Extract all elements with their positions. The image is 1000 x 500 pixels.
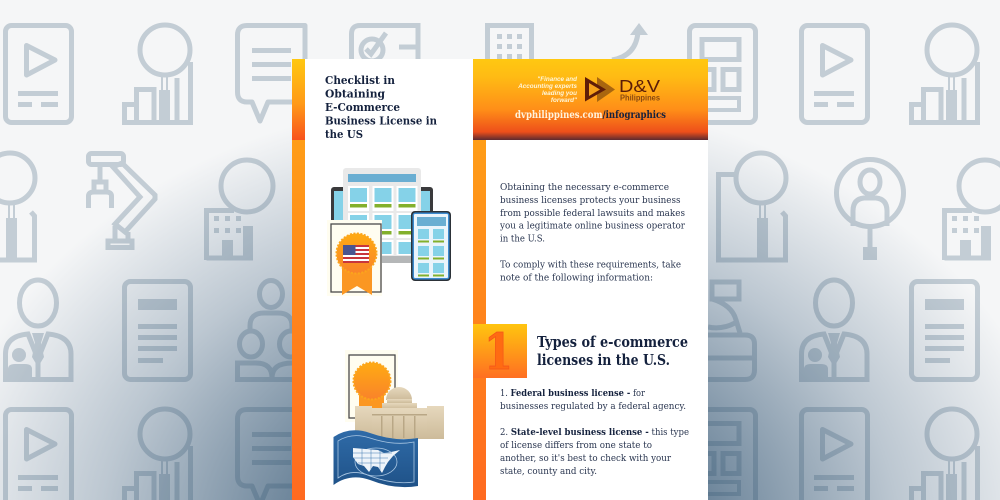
icon: magnifier document bbox=[0, 153, 35, 262]
text block: license types: another, so it's best to check with your bbox=[500, 453, 672, 464]
text block: license types bbox=[500, 388, 689, 477]
title: E-Commerce bbox=[325, 100, 400, 114]
text block: license types: businesses regulated by a federal agency. bbox=[500, 401, 686, 412]
icon: group of people bbox=[235, 280, 302, 382]
icon: speech bubble bbox=[238, 410, 305, 500]
left accent strip lower bbox=[292, 140, 305, 500]
title: Business License in bbox=[325, 114, 438, 128]
certificate with seal bbox=[345, 350, 398, 422]
illustration: e-commerce devices and certificate bbox=[327, 168, 451, 296]
panel: card base bbox=[292, 59, 708, 500]
panel: header banner bbox=[473, 59, 708, 140]
text block: introduction: To comply with these requirements, take bbox=[500, 260, 681, 270]
icon: magnifier bar chart bbox=[122, 25, 193, 125]
text block: license types: of license differs from one state to bbox=[500, 440, 652, 451]
icon: checklist bbox=[352, 26, 418, 61]
title: the US bbox=[325, 127, 363, 141]
icon: document bbox=[912, 282, 978, 380]
government building bbox=[355, 387, 444, 439]
certificate with US flag seal bbox=[327, 220, 382, 296]
text block: license types: state, county and city. bbox=[500, 466, 597, 477]
tagline bbox=[517, 76, 578, 104]
icon: document bbox=[124, 282, 190, 380]
logo: D&V Philippines bbox=[585, 76, 661, 102]
icon: speech bubble bbox=[238, 26, 305, 121]
text block: introduction: business licenses protects your business bbox=[500, 195, 681, 206]
icon: magnifier document bbox=[716, 153, 786, 262]
text block: introduction: you a legitimate online business operator bbox=[499, 220, 686, 232]
text block: introduction bbox=[499, 182, 686, 284]
logo arrow mark bbox=[585, 77, 615, 102]
title: Checklist in bbox=[325, 73, 396, 87]
section 1 heading: Types of e-commerce bbox=[537, 333, 688, 351]
icon: video document bbox=[6, 410, 72, 500]
tagline: Accounting experts bbox=[517, 83, 577, 90]
icon: robot arm bbox=[88, 154, 155, 250]
illustration: federal and state license bbox=[334, 350, 444, 487]
infographic card bbox=[292, 59, 708, 500]
text block: license types: 2. State-level business license - this type bbox=[500, 427, 689, 438]
icon: growth arrow bbox=[612, 23, 648, 60]
title: Obtaining bbox=[325, 86, 385, 100]
section 1 heading: licenses in the U.S. bbox=[537, 351, 670, 369]
laptop bbox=[331, 187, 433, 263]
icon: executive bbox=[3, 280, 73, 382]
website link: dvphilippines.com/infographics bbox=[515, 109, 666, 121]
icon: person in magnifier bbox=[836, 160, 904, 260]
icon: layout form bbox=[690, 410, 756, 500]
icon: executive bbox=[799, 280, 869, 382]
logo wordmark: D&V bbox=[619, 76, 660, 96]
icon: office building bbox=[488, 26, 532, 60]
text block: introduction: note of the following information: bbox=[500, 272, 653, 284]
icon: magnifier bar chart bbox=[909, 25, 980, 125]
tagline: "Finance and bbox=[537, 76, 577, 83]
icon: magnifier bar chart bbox=[909, 409, 980, 500]
icon: magnifier bar chart bbox=[122, 409, 193, 500]
title bbox=[325, 73, 438, 141]
text block: introduction: from possible federal lawsuits and makes bbox=[500, 208, 685, 219]
flag with US map bbox=[334, 430, 418, 487]
tagline: forward" bbox=[551, 97, 578, 104]
section 1 number badge bbox=[473, 322, 527, 381]
icon: layout form bbox=[690, 26, 756, 122]
section 1 heading bbox=[537, 333, 688, 369]
web page bbox=[343, 168, 421, 256]
numeral 1: 1 bbox=[484, 322, 513, 381]
text block: introduction: Obtaining the necessary e-commerce bbox=[500, 182, 669, 193]
tablet bbox=[411, 211, 451, 281]
icon: reception desk bbox=[700, 282, 754, 380]
icon: video document bbox=[6, 26, 72, 122]
tagline: leading you bbox=[542, 90, 577, 97]
center accent strip bbox=[473, 140, 486, 500]
icon: magnifier building bbox=[206, 160, 273, 260]
text block: introduction: in the U.S. bbox=[500, 234, 545, 244]
left accent strip top bbox=[292, 59, 305, 140]
icon: video document bbox=[802, 26, 868, 122]
logo subtitle: Philippines bbox=[620, 94, 661, 102]
icon: video document bbox=[802, 410, 868, 500]
text block: license types: 1. Federal business license - for bbox=[500, 388, 645, 399]
icon: magnifier building bbox=[944, 160, 1000, 260]
